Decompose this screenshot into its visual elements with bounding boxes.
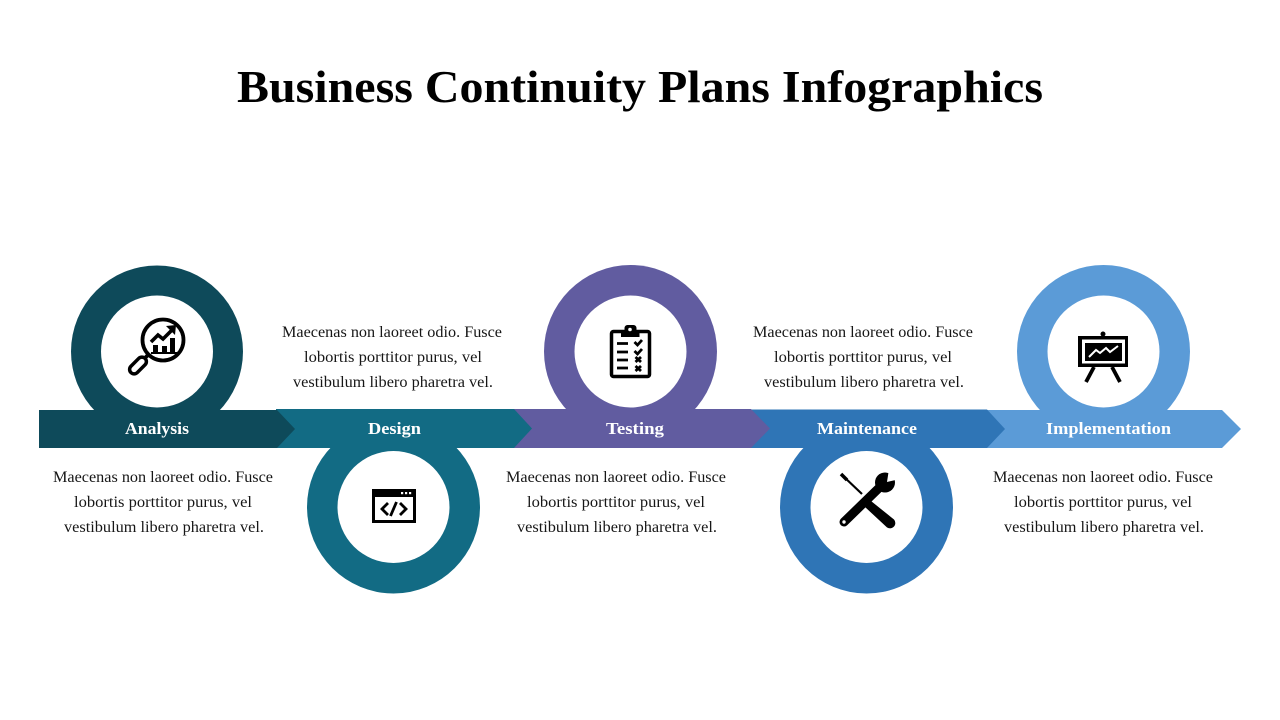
arrow: Design — [276, 409, 532, 448]
label: Implementation: Implementation — [1046, 419, 1171, 438]
circle ring: Design — [307, 420, 480, 594]
circle ring: Implementation — [1017, 265, 1190, 438]
circle ring: Maintenance — [780, 420, 953, 594]
arrow: Analysis — [39, 410, 295, 448]
icon: presentation easel — [1078, 332, 1128, 382]
text block: Testing — [506, 469, 726, 536]
icon: code window — [372, 489, 416, 522]
text block: Analysis: vestibulum libero pharetra vel. — [64, 519, 264, 536]
icon: magnifier with chart — [128, 320, 184, 376]
text block: Analysis: Maecenas non laoreet odio. Fusce — [53, 469, 273, 486]
text block: Testing: Maecenas non laoreet odio. Fusce — [506, 469, 726, 486]
text block: Maintenance — [753, 324, 973, 391]
arrow: Implementation — [987, 410, 1241, 448]
text block: Implementation — [993, 469, 1213, 536]
icon: wrench and screwdriver — [841, 469, 900, 528]
label: Testing: Testing — [606, 419, 665, 438]
title: Business Continuity Plans Infographics — [237, 62, 1043, 112]
circle ring: Analysis — [71, 266, 243, 438]
text block: Testing: vestibulum libero pharetra vel. — [517, 519, 717, 536]
label: Design: Design — [368, 419, 421, 438]
text block: Maintenance: vestibulum libero pharetra vel. — [764, 374, 964, 391]
arrow: Testing — [513, 409, 770, 448]
text block: Implementation: vestibulum libero pharetra vel. — [1004, 519, 1204, 536]
text block: Implementation: lobortis porttitor purus, vel — [1014, 494, 1193, 511]
text block: Maintenance: lobortis porttitor purus, vel — [774, 349, 953, 366]
icon: clipboard checklist — [612, 325, 650, 376]
arrow: Maintenance — [751, 410, 1005, 448]
text block: Implementation: Maecenas non laoreet odio. Fusce — [993, 469, 1213, 486]
label: Analysis: Analysis — [125, 419, 190, 438]
text block: Design: lobortis porttitor purus, vel — [304, 349, 483, 366]
text block: Design — [282, 324, 502, 391]
text block: Analysis — [53, 469, 273, 536]
text block: Testing: lobortis porttitor purus, vel — [527, 494, 706, 511]
text block: Design: vestibulum libero pharetra vel. — [293, 374, 493, 391]
text block: Design: Maecenas non laoreet odio. Fusce — [282, 324, 502, 341]
circle ring: Testing — [544, 265, 717, 438]
text block: Analysis: lobortis porttitor purus, vel — [74, 494, 253, 511]
text block: Maintenance: Maecenas non laoreet odio. Fusce — [753, 324, 973, 341]
label: Maintenance: Maintenance — [817, 419, 917, 438]
